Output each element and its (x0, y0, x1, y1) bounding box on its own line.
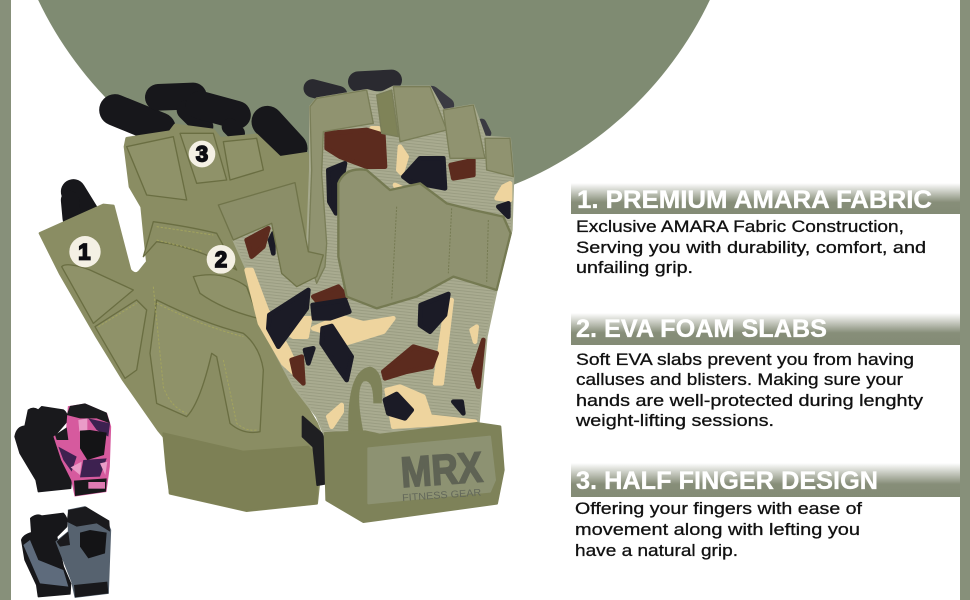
camo dark patches (268, 158, 508, 418)
body text 2 (575, 350, 924, 430)
black mannequin fingers (70, 80, 487, 218)
body text 2: hands are well-protected during lenghty (576, 391, 924, 410)
heading band 1 (571, 183, 960, 214)
camo fabric base (233, 87, 513, 437)
MRX logo: MRX (399, 444, 485, 497)
badge 2: 2 (215, 247, 227, 272)
badge 3: 3 (196, 142, 208, 167)
badge 1 (69, 236, 101, 267)
palm pads and stitching (62, 133, 263, 432)
heading 2: 2. EVA FOAM SLABS (576, 315, 827, 343)
finger suede cuffs (308, 87, 513, 283)
badge 3 (189, 141, 215, 167)
blue pair palm glove (22, 513, 71, 597)
section 1: premium amara fabric (571, 183, 960, 277)
heading band 2 (571, 313, 960, 345)
wrist closure dark strap (303, 417, 327, 485)
heading 1: 1. PREMIUM AMARA FABRIC (577, 186, 932, 214)
pink pair finger tops (55, 403, 110, 440)
body text 1: Serving you with durability, comfort, and (576, 238, 926, 257)
body text 2: Soft EVA slabs prevent you from having (576, 350, 914, 369)
pink pair black palm glove (15, 407, 72, 492)
camo cream patches (247, 128, 510, 427)
pink pair strap (74, 478, 107, 496)
blue pair palm camo side (23, 540, 68, 587)
blue pair back glove (56, 507, 111, 597)
body text 1 (576, 217, 926, 277)
velcro loop (348, 367, 382, 432)
knuckle pad (338, 169, 511, 308)
body text 2: calluses and blisters. Making sure your (576, 370, 903, 389)
stitching accents (98, 227, 257, 430)
pink pair camo back glove (54, 404, 111, 496)
palm suede body (40, 125, 330, 511)
wrist strap (325, 423, 503, 522)
background circle (2, 0, 746, 212)
main product image: pair of camo gloves (40, 80, 513, 522)
body text 3: movement along with lefting you (575, 520, 860, 539)
palm side glove (40, 125, 330, 511)
body text 1: Exclusive AMARA Fabric Construction, (576, 217, 904, 236)
body text 3: have a natural grip. (575, 541, 738, 560)
left border strip (0, 0, 11, 600)
fitness gear text: FITNESS GEAR (402, 488, 482, 504)
pink pair lighter patches (71, 418, 107, 475)
body text 1: unfailing grip. (576, 258, 693, 277)
right border strip (960, 0, 970, 600)
camo brown patches (247, 130, 483, 387)
back side camo glove (218, 87, 513, 522)
blue pair finger tops (57, 507, 110, 547)
blue pair knuckle pad (80, 530, 107, 558)
body text 3: Offering your fingers with ease of (575, 499, 862, 518)
pink pair knuckle pad (80, 430, 107, 460)
knuckle pad seams (392, 207, 488, 300)
section 2: eva foam slabs (571, 313, 960, 430)
wrist band (163, 433, 317, 511)
heading band 3 (571, 463, 960, 497)
pink pair camo patches (58, 418, 110, 477)
badge 2 (207, 245, 235, 274)
heading 3: 3. HALF FINGER DESIGN (576, 467, 878, 495)
badge 1: 1 (78, 239, 90, 264)
section 3: half finger design (571, 463, 960, 560)
thumbnail: blue camo gloves (22, 507, 111, 597)
thumb suede tab (218, 183, 323, 287)
body text 3 (575, 499, 862, 560)
pink pair logo (88, 482, 105, 489)
blue pair strap (74, 582, 108, 597)
strap logo patch (368, 437, 495, 503)
thumbnail: pink camo gloves (15, 403, 111, 496)
body text 2: weight-lifting sessions. (575, 411, 774, 430)
